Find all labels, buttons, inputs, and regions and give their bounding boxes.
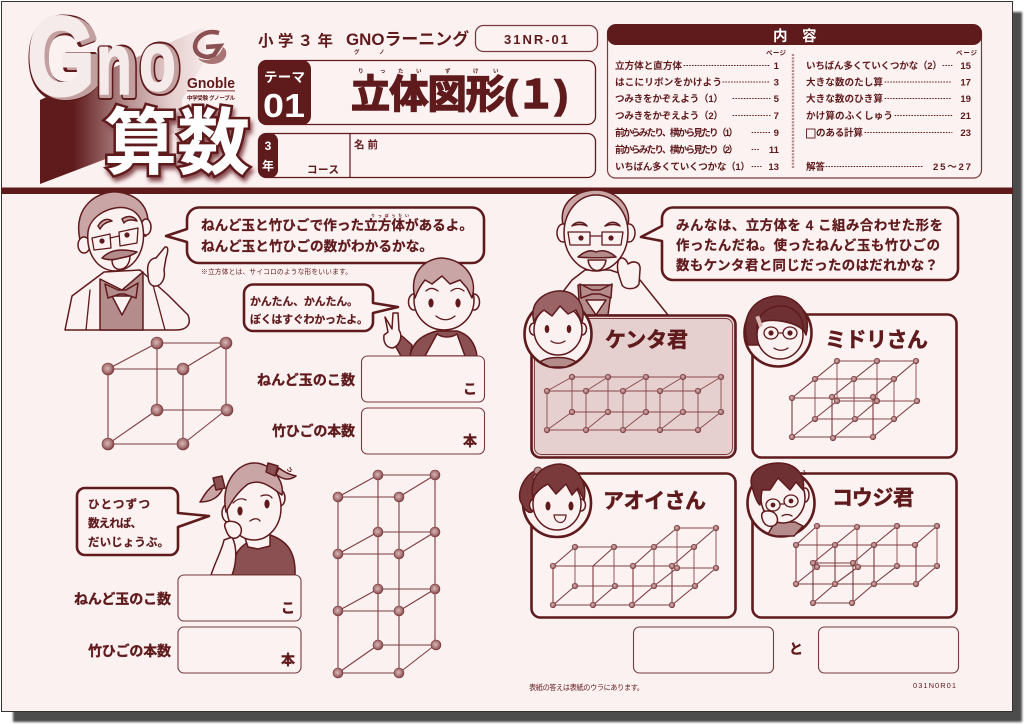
diagram: Midori shape: [789, 358, 920, 441]
panel: Midori: ミドリさん: [825, 329, 928, 352]
panel: contents: 大きな数のひき算: [806, 93, 883, 105]
speech bubble: professor 2: [641, 208, 958, 280]
diagram: cube: [102, 337, 233, 450]
code box: [476, 26, 598, 52]
answer row: clay balls (tall shape): [74, 575, 301, 621]
panel: contents: いちばん多くていくつかな（1）: [615, 161, 750, 173]
theme box: テーマ: [264, 70, 305, 85]
panel: Kouji: コウジ君: [832, 487, 914, 510]
answer row: clay balls (cube): [257, 356, 484, 402]
speech bubble: professor 1: りっぽうたい: [371, 212, 409, 218]
panel: contents: 大きな数のたし算: [806, 76, 883, 88]
speech bubble: girl: 数えれば、: [88, 516, 142, 530]
character: professor pointing: [65, 192, 189, 330]
panel: contents: 9: [774, 128, 779, 139]
logo: Gno 算数: 算数: [104, 103, 250, 184]
footer code: 031N0R01: [913, 681, 956, 690]
course title: GNO learning: グ: [354, 48, 360, 56]
answer row: sticks (cube): 本: [463, 433, 477, 449]
speech bubble: boy: かんたん、かんたん。: [250, 295, 358, 308]
answer row: clay balls (cube): ねんど玉のこ数: [257, 372, 355, 388]
panel: contents: 21: [960, 111, 972, 122]
code box: 31NR-01: [504, 32, 568, 47]
speech bubble: professor 1: ねんど玉と竹ひごの数がわかるかな。: [201, 238, 433, 254]
logo: Gno 算数: n: [96, 16, 138, 115]
answer row: sticks (cube): [272, 408, 484, 454]
avatar: Midori: [744, 296, 812, 366]
logo: Gno 算数: o: [140, 15, 180, 109]
speech bubble: professor 1: [166, 208, 484, 263]
panel: contents: 容: [802, 28, 817, 45]
panel: contents: つみきをかぞえよう（1）: [615, 93, 723, 105]
answer row: sticks (tall shape): [88, 627, 301, 673]
answer row: clay balls (tall shape): こ: [281, 600, 295, 616]
logo: Gno 算数: o: [140, 15, 180, 109]
theme box: [258, 60, 596, 125]
panel: contents: 内: [773, 28, 788, 45]
panel: contents: ページ: [766, 49, 786, 57]
panel: contents: 13: [768, 162, 779, 173]
answer row: clay balls (cube): こ: [463, 381, 477, 397]
panel: contents: 立方体と直方体: [615, 60, 682, 72]
panel: contents: のある計算: [816, 127, 863, 139]
panel: contents: 前からみたり、横から見たり（2）: [615, 144, 738, 156]
speech bubble: professor 2: 作ったんだね。使ったねんど玉も竹ひごの: [676, 237, 940, 253]
speech bubble: professor 2: 数もケンタ君と同じだったのはだれかな？: [676, 258, 938, 273]
panel: contents: 7: [774, 111, 779, 122]
answer row: sticks (cube): 竹ひごの本数: [272, 423, 355, 439]
panel: contents: 15: [960, 61, 972, 72]
panel: Aoi: アオイさん: [603, 490, 706, 513]
panel: contents: 解答: [806, 161, 825, 173]
title ruby: りったいずけい: [358, 67, 499, 75]
character: thinking girl: [200, 463, 296, 575]
footer note: 表紙の答えは表紙のウラにあります。: [529, 683, 644, 692]
speech bubble: professor 2: みんなは、立方体を 4 こ組み合わせた形を: [676, 217, 943, 233]
logo: Gno 算数: n: [96, 16, 138, 115]
theme box: 01: [263, 87, 305, 124]
panel: contents: はこにリボンをかけよう: [615, 76, 722, 88]
course and name box: コース: [307, 164, 339, 176]
panel: Kenta: [532, 316, 736, 458]
answer row: clay balls (tall shape): ねんど玉のこ数: [74, 591, 171, 607]
panel: contents: かけ算のふくしゅう: [806, 110, 893, 122]
panel: contents: 3: [774, 78, 779, 88]
avatar: Kouji: [748, 463, 814, 536]
speech bubble: boy: [244, 284, 398, 331]
panel: contents: 5: [774, 94, 780, 105]
course and name box: 年: [262, 158, 274, 173]
course and name box: [258, 133, 596, 178]
panel: Kouji: [752, 474, 956, 618]
panel: contents: [607, 24, 982, 178]
panel: Kenta: ケンタ君: [605, 329, 688, 352]
panel: contents: ページ: [956, 49, 978, 57]
panel: contents: 1: [774, 61, 780, 72]
course title: GNO learning: GNOラーニング: [346, 29, 469, 49]
speech bubble: girl: だいじょうぶ。: [88, 536, 169, 549]
avatar: Kenta: [524, 291, 592, 368]
logo: Gno 算数: [27, 0, 252, 188]
character: boy with victory sign: [384, 258, 480, 356]
diagram: Kenta shape: [544, 374, 724, 433]
speech bubble: professor 1: ねんど玉と竹ひごで作った立方体があるよ。: [201, 217, 473, 233]
panel: contents: 前からみたり、横から見たり（1）: [615, 127, 738, 139]
grade label: 小学３年: [258, 31, 333, 50]
course and name box: 3: [265, 139, 272, 153]
logo: Gnoble brand: Gnoble: [187, 76, 235, 92]
speech bubble: boy: ぼくはすぐわかったよ。: [250, 313, 368, 326]
panel: contents: 11: [769, 145, 780, 156]
diagram: tall stacked cubes: [333, 470, 441, 678]
theme title: 立体図形(１): [351, 74, 568, 117]
logo: Gno 算数: o: [139, 14, 176, 108]
panel: Midori: [752, 314, 956, 458]
answer row: sticks (tall shape): 竹ひごの本数: [88, 643, 171, 659]
answer boxes: [634, 627, 958, 673]
logo: Gno 算数: 算数: [106, 107, 252, 188]
answer boxes: と: [789, 641, 803, 657]
character: thinking girl: ウ: [285, 467, 293, 473]
panel: contents: 23: [960, 128, 971, 139]
diagram: Aoi shape: [550, 525, 719, 608]
logo: Gnoble brand: 中学受験 グノーブル: [187, 94, 235, 102]
footnote: ※立方体とは、サイコロのような形をいいます。: [201, 267, 352, 276]
panel: contents: 19: [960, 94, 971, 105]
speech bubble: girl: ひとつずつ: [88, 497, 150, 511]
character: professor with fist: [545, 190, 668, 315]
answer row: sticks (tall shape): 本: [281, 652, 295, 668]
avatar: Kouji: ウ: [799, 470, 807, 476]
avatar: Aoi: [520, 464, 591, 537]
logo: Gnoble brand: [187, 32, 235, 102]
panel: contents: つみきをかぞえよう（2）: [615, 110, 723, 122]
panel: contents: 25～27: [933, 162, 971, 173]
panel: contents: 17: [960, 78, 971, 88]
speech bubble: girl: [77, 488, 209, 555]
diagram: Kouji shape: [793, 523, 940, 606]
panel: contents: いちばん多くていくつかな（2）: [806, 60, 942, 72]
course title: GNO learning: ノ: [379, 50, 385, 56]
panel: Aoi: [532, 474, 736, 618]
course and name box: 名前: [354, 138, 378, 151]
logo: Gno 算数: n: [96, 14, 132, 113]
